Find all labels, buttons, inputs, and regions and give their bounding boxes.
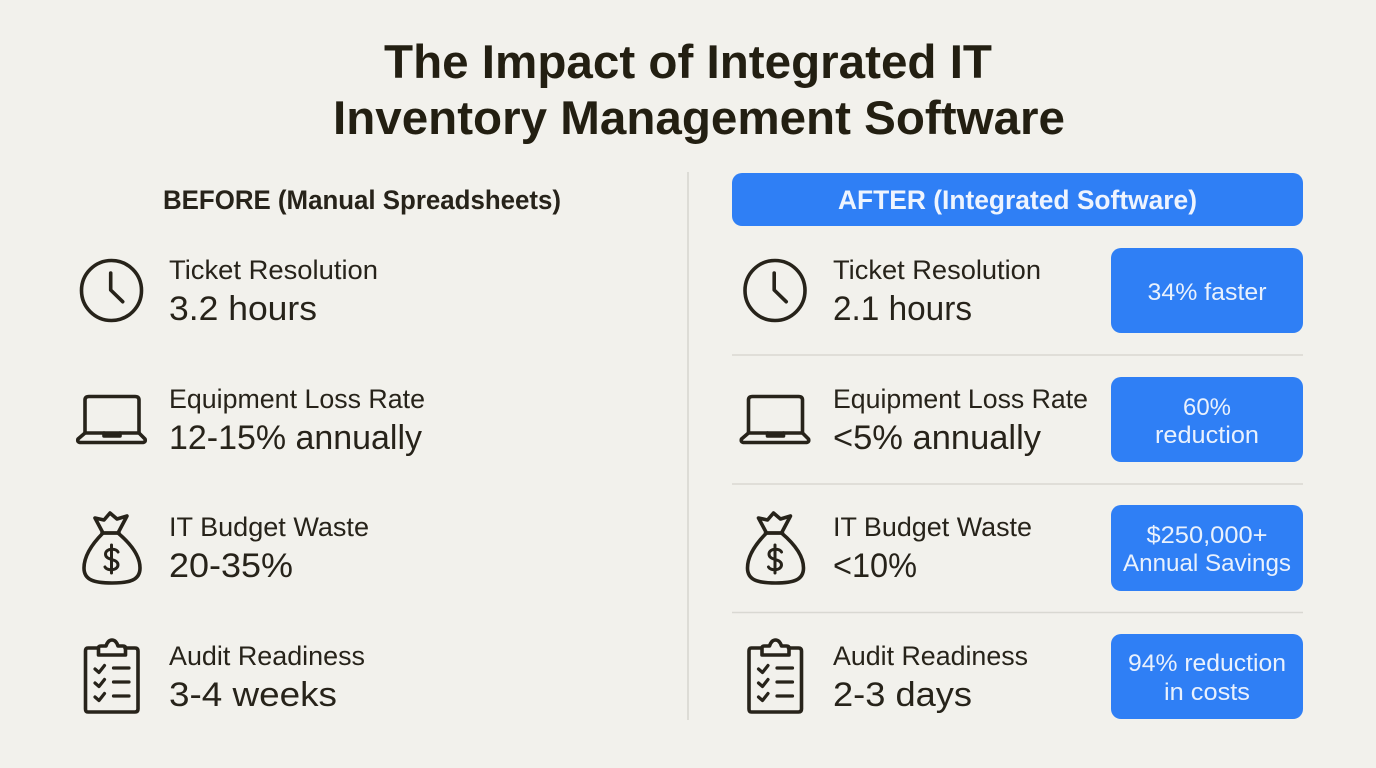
row: ticket resolution after [745, 248, 1303, 333]
heading: before: BEFORE (Manual Spreadsheets) [163, 185, 561, 215]
icon: money bag [84, 513, 140, 583]
badge: 60% reduction: 60% [1183, 394, 1231, 421]
badge: 34% faster: 34% faster [1148, 279, 1266, 306]
icon: checklist clipboard [749, 640, 802, 712]
icon: laptop [78, 396, 145, 442]
heading: after: AFTER (Integrated Software) [838, 185, 1197, 215]
row: budget waste after [748, 505, 1303, 591]
row: budget waste before: 20-35% [169, 547, 293, 585]
icon: checklist clipboard [86, 640, 138, 712]
row: audit readiness after [749, 634, 1303, 719]
row: equipment loss after: Equipment Loss Rate [833, 384, 1088, 414]
row: equipment loss before [78, 384, 425, 457]
row: ticket resolution after: Ticket Resolution [833, 255, 1041, 285]
row: ticket resolution after: 2.1 hours [833, 290, 972, 328]
row: budget waste after: IT Budget Waste [833, 512, 1032, 542]
row: audit readiness before: Audit Readiness [169, 641, 365, 671]
row: equipment loss after [741, 377, 1303, 462]
row: equipment loss after: <5% annually [833, 419, 1041, 457]
badge: 94% reduction in costs: in costs [1164, 679, 1250, 706]
row: audit readiness before: 3-4 weeks [169, 676, 337, 714]
title: The Impact of Integrated IT [384, 36, 992, 89]
row: budget waste after: <10% [833, 547, 917, 585]
badge: 94% reduction in costs [1111, 634, 1303, 719]
row: ticket resolution before [82, 255, 378, 328]
icon: laptop [741, 396, 809, 442]
heading: after [732, 173, 1303, 226]
row: equipment loss before: Equipment Loss Rate [169, 384, 425, 414]
row: equipment loss before: 12-15% annually [169, 419, 422, 457]
row: budget waste before: IT Budget Waste [169, 512, 369, 542]
row: ticket resolution before: Ticket Resolution [169, 255, 378, 285]
title [333, 36, 1065, 145]
panel: after [732, 173, 1303, 719]
badge: annual savings: $250,000+ [1146, 522, 1268, 549]
row: ticket resolution before: 3.2 hours [169, 290, 317, 328]
icon: clock [82, 260, 142, 320]
row: budget waste before [84, 512, 369, 585]
icon: clock [745, 260, 805, 320]
badge: 34% faster [1111, 248, 1303, 333]
panel: before [78, 185, 561, 714]
badge: 60% reduction [1111, 377, 1303, 462]
badge: 60% reduction: reduction [1155, 422, 1259, 449]
title: Inventory Management Software [333, 92, 1065, 145]
badge: annual savings: Annual Savings [1123, 550, 1291, 577]
row: audit readiness after: Audit Readiness [833, 641, 1028, 671]
row: audit readiness before [86, 640, 365, 714]
badge: 94% reduction in costs: 94% reduction [1128, 650, 1286, 677]
badge: annual savings [1111, 505, 1303, 591]
icon: money bag [748, 513, 804, 583]
row: audit readiness after: 2-3 days [833, 676, 972, 714]
